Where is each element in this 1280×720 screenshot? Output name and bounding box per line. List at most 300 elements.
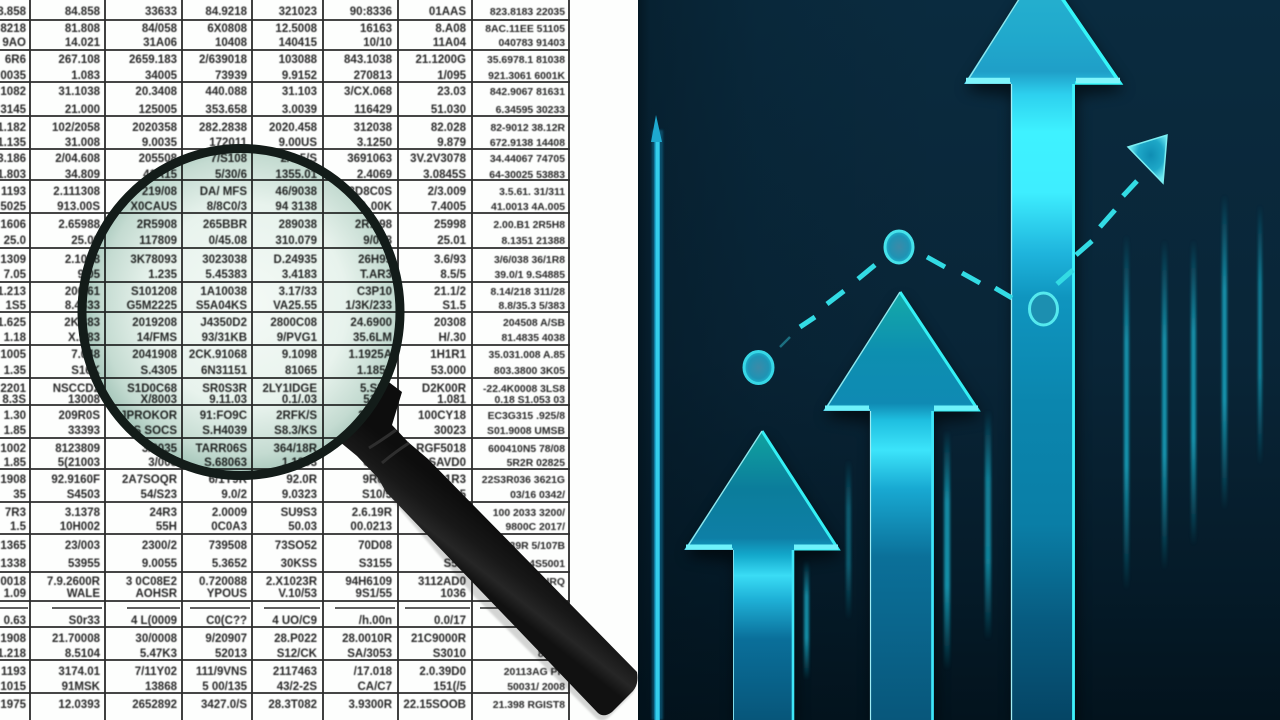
table figures: VA25.55 — [273, 300, 318, 312]
table figures: 7.048 — [71, 349, 101, 361]
table figures: 1H1R1 — [430, 349, 467, 361]
table figures: C3P10 — [357, 286, 392, 298]
table figures: 24R3 — [150, 507, 177, 519]
table figures: A.00K — [359, 201, 393, 213]
table figures: 8.A08 — [435, 23, 467, 35]
table figures: 25.01 — [437, 235, 467, 247]
table figures: 21.000 — [65, 104, 100, 116]
table figures: AOHSR — [135, 588, 178, 600]
table figures: 70D08 — [358, 540, 393, 552]
table figures: 1002 — [0, 443, 26, 455]
table figures: 8.4533 — [65, 300, 100, 312]
table figures: 2/639018 — [199, 54, 248, 66]
table figures: 8.1351 21388 — [501, 236, 565, 247]
table figures: 50.03 — [288, 521, 317, 533]
table figures: 91:FO9C — [200, 410, 247, 422]
table figures: 2/3.009 — [428, 186, 466, 198]
table figures: 2A7SOQR — [122, 474, 178, 486]
table figures: S SOCS — [134, 425, 177, 437]
table figures: 2.X1023R — [266, 576, 318, 588]
table figures: 3.0039 — [282, 104, 317, 116]
table figures: DA/ MFS — [200, 186, 247, 198]
table figures: 6/1Y9R — [209, 474, 248, 486]
table figures: 1908 — [0, 633, 27, 645]
trend point: first marker — [744, 352, 773, 384]
table figures: 30023 — [434, 425, 466, 437]
table figures: 9.0035 — [142, 137, 178, 149]
table figures: /17.018 — [354, 666, 393, 678]
table figures: 30KSS — [281, 558, 317, 570]
table figures: 93/31KB — [202, 332, 247, 344]
table figures: 265BBR — [203, 219, 248, 231]
table figures: 14/FMS — [137, 332, 177, 344]
panel: financial spreadsheet — [0, 0, 638, 720]
table figures: 7.05 — [4, 269, 27, 281]
table figures: 3023038 — [202, 254, 248, 266]
table figures: S.68063 — [204, 457, 247, 469]
table figures: 13008 — [68, 394, 101, 406]
table figures: 0.0/17 — [434, 615, 466, 627]
table figures: 10H002 — [60, 521, 100, 533]
arrow: tall rising arrow — [964, 0, 1124, 720]
table figures: 46/9038 — [275, 186, 318, 198]
table figures: 1.083 — [71, 70, 100, 82]
table figures: J4350D2 — [200, 317, 247, 329]
table figures: D.24935 — [274, 254, 318, 266]
table figures: 54/S23 — [141, 489, 177, 501]
table figures: 8.8/35.3 5/383 — [499, 301, 565, 312]
table figures: 41A15 — [143, 169, 178, 181]
table figures: 82-9012 38.12R — [490, 123, 565, 134]
table figures: 803.3800 3K05 — [494, 366, 565, 377]
table figures: 1.235 — [148, 269, 178, 281]
table figures: S1.5 — [442, 300, 467, 312]
table figures: 28.P022 — [274, 633, 317, 645]
table figures: 22S3R036 3621G — [482, 475, 565, 486]
table figures: S101208 — [131, 286, 178, 298]
table figures: 84/058 — [142, 23, 178, 35]
table figures: 94 3138 — [275, 201, 318, 213]
table figures: 20113AG PR — [504, 667, 565, 678]
table figures: 1.18 — [4, 332, 27, 344]
table figures: 3691063 — [347, 153, 392, 165]
arrow: dashed line arrowhead — [1128, 135, 1167, 183]
table figures: 3.0845S — [423, 169, 466, 181]
table figures: 31.1038 — [58, 86, 101, 98]
table figures: 0C0A3 — [211, 521, 247, 533]
table figures: 8123809 — [55, 443, 100, 455]
arrow: medium rising arrow — [823, 292, 982, 720]
table figures: 3K78093 — [130, 254, 177, 266]
table figures: 2.1008 — [65, 254, 101, 266]
table figures: S16K — [71, 365, 101, 377]
table figures: 2R0 — [546, 634, 565, 645]
table figures: C0(C?? — [206, 615, 247, 627]
table figures: 8/8C0/3 — [207, 201, 247, 213]
table figures: 2300/2 — [142, 540, 177, 552]
table figures: 1908 — [0, 474, 27, 486]
table figures: 28.3T082 — [268, 699, 317, 711]
table figures: 34.44067 74705 — [490, 154, 565, 165]
table figures: 24.6900 — [350, 317, 392, 329]
table grid lines — [0, 0, 570, 720]
table figures: 1.09 — [4, 588, 26, 600]
table figures: 6.34595 30233 — [496, 105, 565, 116]
magnifier lens — [82, 149, 400, 475]
table figures: 25.09 — [71, 235, 100, 247]
table figures: 00.0213 — [350, 521, 392, 533]
table figures: 5.45383 — [205, 269, 247, 281]
table figures: 83.S0 — [538, 649, 565, 660]
table figures: 200.61 — [65, 286, 101, 298]
table figures: 172011 — [209, 137, 248, 149]
table figures: 41.0013 4A.005 — [491, 202, 565, 213]
table figures: 91MSK — [62, 681, 101, 693]
table figures: D2K00R — [422, 383, 467, 395]
table figures: 0/45.08 — [209, 235, 248, 247]
table figures: 600410N5 78/08 — [488, 444, 565, 455]
table figures: 28.0010R — [342, 633, 393, 645]
table figures: 7/S108 — [211, 153, 248, 165]
table figures: S5A — [444, 558, 466, 570]
table figures: 3V.2V3078 — [410, 153, 467, 165]
table figures: 2020.458 — [269, 122, 318, 134]
table figures: S0r33 — [69, 615, 100, 627]
table figures: 5(21003 — [58, 457, 100, 469]
table figures: 9S1/55 — [356, 588, 393, 600]
table figures: 34005 — [145, 70, 178, 82]
table figures: 2KC83 — [64, 317, 100, 329]
table figures: 2659.183 — [129, 54, 177, 66]
table figures: V.10/53 — [278, 588, 317, 600]
table figures: 2.IRQ — [538, 577, 565, 588]
table figures: S12/CK — [277, 648, 318, 660]
table figures: YPOUS — [207, 588, 247, 600]
table figures: 33393 — [68, 425, 100, 437]
table figures: 100CY18 — [418, 410, 467, 422]
magnifier handle — [340, 380, 638, 720]
table figures: RGF5018 — [416, 443, 467, 455]
table figures: 64-30025 53883 — [489, 170, 565, 181]
icon: thin rising axis arrow — [651, 115, 663, 720]
table figures: 92.0R — [286, 474, 318, 486]
table figures: 7.9.2600R — [47, 576, 101, 588]
table figures: 140415 — [279, 37, 318, 49]
table figures: 0.18 S1.053 03 — [494, 395, 565, 406]
table figures: 2R.HS — [358, 410, 392, 422]
table figures: 84.9218 — [205, 6, 248, 18]
table figures: 1309 — [0, 254, 26, 266]
table figures: 12.5008 — [275, 23, 318, 35]
table figures: 92.9160F — [51, 474, 100, 486]
table figures: 2.9Z — [443, 507, 466, 519]
table figures: 1036 — [440, 588, 466, 600]
table figures: 99.5S — [362, 425, 392, 437]
table figures: 73939 — [215, 70, 247, 82]
table figures: 2019208 — [132, 317, 178, 329]
table figures: 0.720088 — [199, 576, 248, 588]
table figures: 289038 — [279, 219, 318, 231]
table figures: 1.85 — [4, 457, 27, 469]
table figures: 209R0S — [58, 410, 100, 422]
table figures: 25.0 — [4, 235, 26, 247]
table figures: 35.031.008 A.85 — [489, 350, 565, 361]
table figures: 9800C 2017/ — [505, 522, 565, 533]
table figures: 0018 — [0, 576, 27, 588]
table figures: 2.0.39D0 — [419, 666, 466, 678]
table figures: 2LY1IDGE — [262, 383, 317, 395]
table figures: 1S5 — [6, 300, 27, 312]
table figures: 3.4183 — [282, 269, 317, 281]
table figures: 310.079 — [275, 235, 317, 247]
table figures: 3/1K.8 — [358, 443, 393, 455]
table figures: 7R — [451, 540, 467, 552]
table figures: 35.6978.1 81038 — [487, 55, 565, 66]
table figures: 21.70008 — [52, 633, 101, 645]
table figures: 204508 A/SB — [503, 318, 565, 329]
table figures: 9.00US — [279, 137, 317, 149]
table figures: 117809 — [139, 235, 177, 247]
table figures: 3/6/038 36/1R8 — [494, 255, 565, 266]
table figures: SA/3053 — [347, 648, 392, 660]
table figures: 3145 — [0, 104, 27, 116]
table figures: 2R.1R3 — [427, 474, 466, 486]
table figures: 3/CX.068 — [344, 86, 393, 98]
table figures: SU9S3 — [281, 507, 317, 519]
table figures: 14.021 — [65, 37, 101, 49]
table figures: 34.809 — [65, 169, 100, 181]
table figures: 1.1925A — [349, 349, 392, 361]
table figures: 2R.998 — [355, 219, 393, 231]
table figures: 51.08 — [363, 394, 393, 406]
table figures: 8218 — [0, 23, 27, 35]
table figures: X.A83 — [68, 332, 100, 344]
table figures: 9.0055 — [142, 558, 178, 570]
table figures: 116429 — [354, 104, 392, 116]
table figures: 11A04 — [433, 37, 467, 49]
table figures: 9.9152 — [282, 70, 317, 82]
table figures: G5M2225 — [126, 300, 178, 312]
table figures: 31.103 — [282, 86, 317, 98]
table figures: 267.108 — [58, 54, 101, 66]
table figures: S.H4039 — [202, 425, 247, 437]
table figures: 111/9VNS — [196, 666, 247, 678]
table figures: 35.6LM — [353, 332, 392, 344]
table figures: 30/0008 — [135, 633, 178, 645]
table figures: 3.1250 — [357, 137, 392, 149]
table figures: 3174.01 — [58, 666, 101, 678]
table figures: 1.85 — [4, 425, 27, 437]
table figures: 440.088 — [205, 86, 248, 98]
table figures: 219/08 — [142, 186, 178, 198]
table figures: 82.028 — [431, 122, 467, 134]
table figures: 1975 — [0, 699, 27, 711]
table figures: 1/095 — [437, 70, 467, 82]
table figures: 312038 — [354, 122, 393, 134]
table figures: WALE — [67, 588, 100, 600]
table figures: 55H — [156, 521, 177, 533]
table figures: SR0S3R — [202, 383, 248, 395]
table figures: S/R.5 — [437, 489, 467, 501]
panel: growth chart background — [638, 0, 1280, 720]
table figures: 125005 — [139, 104, 178, 116]
table figures: 35 — [13, 489, 27, 501]
table figures: 2.4069 — [357, 169, 392, 181]
table figures: 4 UO/C9 — [272, 615, 317, 627]
table figures: 90:8336 — [350, 6, 392, 18]
table figures: 205508 — [139, 153, 178, 165]
table figures: 39.0/1 9.S4885 — [494, 270, 565, 281]
table figures: 843.1038 — [344, 54, 393, 66]
table figures — [0, 6, 565, 711]
table figures: 12.0393 — [58, 699, 100, 711]
table figures: 9R0R — [363, 474, 393, 486]
table figures: S1D0C68 — [127, 383, 178, 395]
table figures: 53.000 — [431, 365, 466, 377]
table figures: 3427.0/S — [201, 699, 247, 711]
table figures: 81065 — [285, 365, 318, 377]
table figures: 23/003 — [65, 540, 100, 552]
table figures: 1.1803 — [282, 457, 317, 469]
table figures: SAVD0 — [428, 457, 466, 469]
table figures: 10/10 — [363, 37, 392, 49]
table figures: 1.081 — [437, 394, 467, 406]
table figures: 8.5104 — [65, 648, 101, 660]
table figures: 20308 — [434, 317, 467, 329]
table figures: 103088 — [279, 54, 318, 66]
table figures: JPROKOR — [120, 410, 178, 422]
table figures: 1.30 — [4, 410, 26, 422]
table figures: S3155 — [359, 558, 393, 570]
table figures: 353.658 — [205, 104, 248, 116]
table figures: S5A04KS — [196, 300, 247, 312]
table figures: 0035 — [0, 70, 27, 82]
table figures: 100 2033 3200/ — [493, 508, 565, 519]
table figures: 6R6 — [5, 54, 26, 66]
table figures: H/.30 — [438, 332, 466, 344]
trend point: second marker — [885, 231, 913, 263]
table figures: 1/3K/233 — [345, 300, 392, 312]
table figures: 7R3 — [5, 507, 26, 519]
table figures: 9.05 — [78, 269, 101, 281]
table figures: 9.11.03 — [209, 394, 247, 406]
table figures: 739508 — [209, 540, 248, 552]
table figures: 2R5908 — [137, 219, 178, 231]
table figures: 13868 — [145, 681, 178, 693]
table figures: 2/04.608 — [55, 153, 101, 165]
table figures: 7/11Y02 — [135, 666, 177, 678]
table figures: 3.9300R — [349, 699, 393, 711]
table figures: 5025 — [0, 201, 27, 213]
table figures: 1015 — [0, 681, 27, 693]
table figures: 2800C08 — [270, 317, 318, 329]
table figures: 26H95 — [358, 254, 393, 266]
table figures: 84.858 — [65, 6, 101, 18]
table figures: 2.0009 — [212, 507, 247, 519]
table figures: 3.1378 — [65, 507, 101, 519]
table figures: S4503 — [67, 489, 100, 501]
table figures: 2020358 — [132, 122, 178, 134]
table figures: 672.9138 14408 — [490, 138, 565, 149]
table figures: 16163 — [360, 23, 392, 35]
table figures: 9.0323 — [282, 489, 317, 501]
table figures: 040783 91403 — [499, 38, 565, 49]
table figures: 3/003 — [148, 457, 177, 469]
table figures: 1606 — [0, 219, 26, 231]
magnifier rim — [82, 148, 400, 476]
table figures: 5 00/135 — [202, 681, 248, 693]
table figures: 23.03 — [437, 86, 466, 98]
table figures: 3.6/93 — [434, 254, 466, 266]
table figures: 5.S3R — [360, 383, 393, 395]
table figures: 282.2838 — [199, 122, 248, 134]
table figures: 102/2058 — [52, 122, 101, 134]
table figures: 739R 5/107B — [504, 541, 565, 552]
trend point: third marker — [1030, 293, 1058, 325]
table figures: 151(/5 — [433, 681, 467, 693]
table figures: 2041908 — [132, 349, 178, 361]
table figures: 25998 — [434, 219, 467, 231]
table figures: 52013 — [215, 648, 247, 660]
table figures: 5R2R 02825 — [507, 458, 565, 469]
table figures: 1A10038 — [200, 286, 248, 298]
table figures: 842.9067 81631 — [490, 87, 565, 98]
table figures: 364/18R — [274, 443, 318, 455]
table figures: 1082 — [0, 86, 26, 98]
table figures: 2RFK/S — [276, 410, 317, 422]
table figures: X0CAUS — [130, 201, 177, 213]
table figures: 01AAS — [429, 6, 466, 18]
table figures: 2652892 — [132, 699, 177, 711]
table figures: 22.15SOOB — [403, 699, 466, 711]
table figures: 5.3652 — [212, 558, 247, 570]
table figures: 1193 — [1, 186, 26, 198]
table figures: 2.111308 — [53, 186, 101, 198]
table figures: 21.1200G — [415, 54, 466, 66]
table figures: X/8003 — [141, 394, 177, 406]
table figures: 20.3408 — [135, 86, 178, 98]
table figures: 94H6109 — [345, 576, 392, 588]
table figures: 53955 — [68, 558, 101, 570]
table figures: 51.030 — [431, 104, 466, 116]
table figures: TARR06S — [195, 443, 247, 455]
table figures: 270813 — [354, 70, 392, 82]
table figures: EC3G315 .925/8 — [488, 411, 565, 422]
table figures: 21.1/2 — [434, 286, 466, 298]
table figures: 9.1098 — [282, 349, 318, 361]
table figures: 921.3061 6001K — [488, 71, 565, 82]
table figures: T.AR3 — [360, 269, 392, 281]
table figures: S10/5 — [362, 489, 393, 501]
table figures: 1338 — [0, 558, 27, 570]
table figures: 1355.01 — [275, 169, 318, 181]
table figures: S.4305 — [141, 365, 178, 377]
table figures: 2.6.19R — [352, 507, 393, 519]
table figures: 2117463 — [273, 666, 317, 678]
table figures: NSCCD2 — [53, 383, 100, 395]
table figures: 1.35 — [4, 365, 27, 377]
table figures: 1005 — [0, 349, 27, 361]
table figures: A4S5001 — [522, 559, 565, 570]
table figures: 3.1 — [450, 521, 467, 533]
table figures: CA/C7 — [357, 681, 392, 693]
table figures: 3D8C0S — [349, 186, 392, 198]
table figures: 1193 — [1, 666, 26, 678]
table figures: 33633 — [145, 6, 177, 18]
table figures: 2.65988 — [58, 219, 101, 231]
table figures: 03/16 0342/ — [510, 490, 565, 501]
icon: magnifying glass — [82, 148, 638, 720]
